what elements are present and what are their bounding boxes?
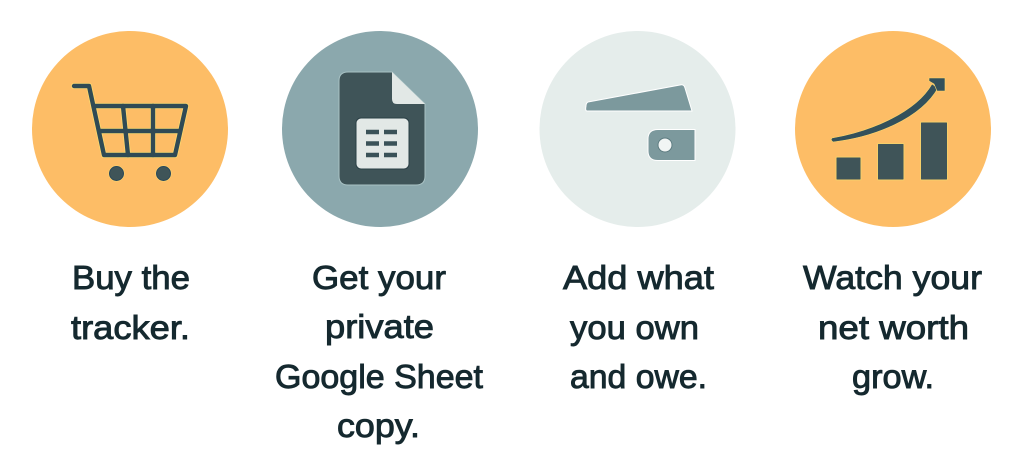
step 3: add what you own and owe xyxy=(540,31,736,395)
label: buy the tracker xyxy=(71,259,190,346)
label: watch your net worth grow: grow. xyxy=(852,358,934,395)
label: watch your net worth grow: net worth xyxy=(818,309,969,346)
label: get your private google sheet copy: Get your xyxy=(312,259,446,296)
label: watch your net worth grow: Watch your xyxy=(803,259,982,296)
icon circle: orange xyxy=(795,31,991,227)
label: add what you own and owe xyxy=(563,259,714,395)
step 1: buy the tracker xyxy=(32,31,228,346)
label: watch your net worth grow xyxy=(803,259,982,395)
label: get your private google sheet copy xyxy=(275,259,483,444)
icon circle: orange xyxy=(32,31,228,227)
label: add what you own and owe: Add what xyxy=(563,259,714,296)
step 4: watch your net worth grow xyxy=(795,31,991,395)
icon: growth chart with arrow xyxy=(831,78,948,180)
icon: shopping cart xyxy=(74,86,186,182)
label: get your private google sheet copy: Google Sheet xyxy=(275,358,483,395)
icon circle: slate xyxy=(282,31,478,227)
label: buy the tracker: Buy the xyxy=(72,259,190,296)
label: add what you own and owe: and owe. xyxy=(570,358,707,395)
icon: spreadsheet document xyxy=(339,72,425,185)
icon circle: pale grey xyxy=(540,31,736,227)
icon: wallet fragments xyxy=(586,85,695,160)
step 2: get your sheet xyxy=(275,31,483,444)
label: get your private google sheet copy: private xyxy=(325,308,434,345)
label: get your private google sheet copy: copy. xyxy=(337,407,420,444)
label: buy the tracker: tracker. xyxy=(71,309,190,346)
label: add what you own and owe: you own xyxy=(570,309,699,346)
